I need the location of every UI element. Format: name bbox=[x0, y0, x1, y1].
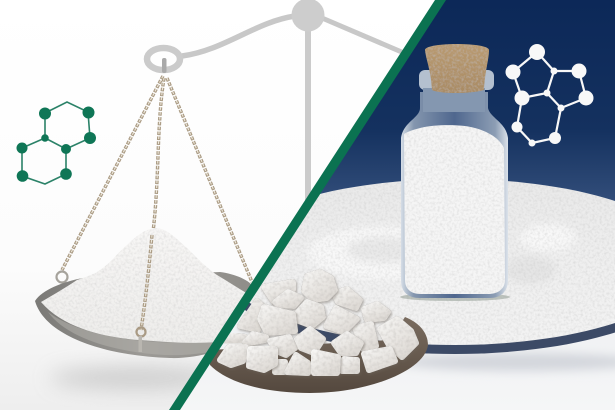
left metal pan bbox=[35, 272, 254, 358]
right brown bowl bbox=[210, 317, 428, 393]
glass jar bbox=[400, 44, 510, 301]
icon: white molecule bbox=[506, 44, 594, 146]
pan shadow bbox=[50, 367, 220, 389]
powder bed on plate bbox=[219, 179, 615, 345]
granule rocks bbox=[220, 272, 416, 373]
panel: left scene with balance and powder bbox=[0, 0, 403, 410]
cork stopper bbox=[425, 44, 489, 93]
hanging chains bbox=[56, 76, 252, 282]
icon: green molecule bbox=[16, 102, 96, 184]
front chain over powder bbox=[136, 235, 152, 352]
navy plate rim bbox=[245, 302, 615, 354]
balance beam and post bbox=[147, 0, 404, 200]
white granules in jar bbox=[404, 125, 505, 294]
diagonal green divider bbox=[169, 0, 446, 410]
panel: right scene with jar and granules bbox=[170, 0, 615, 410]
plate shadow bbox=[400, 353, 615, 371]
powder pile bbox=[41, 228, 248, 343]
